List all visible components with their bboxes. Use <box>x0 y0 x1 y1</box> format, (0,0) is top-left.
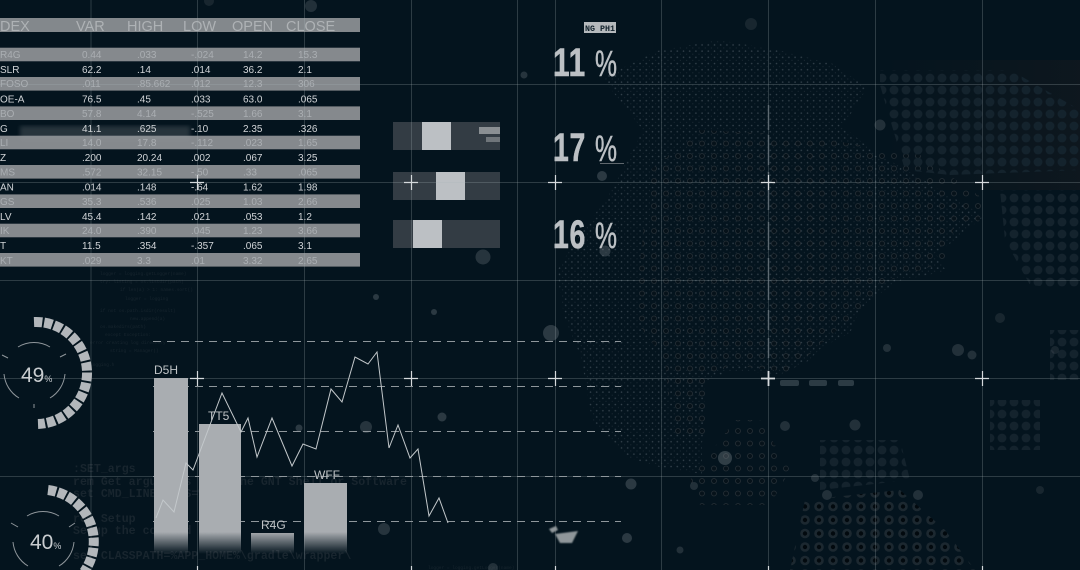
table rows on dark: OE-A <box>0 94 25 106</box>
table header: LOW <box>183 19 216 35</box>
table rows on dark: .014 <box>82 182 102 194</box>
stat 11%: 11 <box>553 41 586 85</box>
table rows on dark: 63.0 <box>243 94 263 106</box>
table rows on dark: G <box>0 124 8 135</box>
table rows on bands: .01 <box>191 256 205 267</box>
table rows on dark: -.64 <box>191 182 209 194</box>
table rows on dark: 1.62 <box>243 182 263 194</box>
table rows on bands: 4.14 <box>137 109 157 120</box>
table header <box>0 18 360 35</box>
table rows on dark: 62.2 <box>82 65 102 76</box>
faint code text: Setup the command line <box>73 525 226 538</box>
stat 16%: 16 <box>553 213 586 257</box>
faint code text: try: listing = os.listdir(path) <box>100 279 184 285</box>
table rows on dark: 36.2 <box>243 65 263 76</box>
bar R4G: R4G <box>261 518 286 532</box>
stat 16%: % <box>595 215 617 256</box>
table rows on bands: BO <box>0 109 15 120</box>
faint code text: logging.h <box>90 362 115 368</box>
table rows on dark: .033 <box>191 94 211 106</box>
table rows on dark: 1.2 <box>298 212 312 223</box>
table rows on dark: .14 <box>137 65 151 76</box>
table rows on bands: .390 <box>137 226 157 237</box>
gauge 40% <box>11 490 94 570</box>
dotted world globe map <box>550 30 1080 570</box>
table rows on dark: .065 <box>298 94 318 106</box>
table rows on bands: -.50 <box>191 168 209 178</box>
table rows on dark: .142 <box>137 212 157 223</box>
table rows on bands: 1.65 <box>298 138 318 149</box>
table rows on dark: .014 <box>191 65 211 76</box>
table rows on bands: 1.03 <box>243 197 263 208</box>
bar D5H: D5H <box>154 363 178 377</box>
table rows on bands: .572 <box>82 168 102 178</box>
table rows on dark: .002 <box>191 153 211 164</box>
table rows on bands: 3.32 <box>243 256 263 267</box>
bar TT5: TT5 <box>208 409 230 423</box>
table rows on bands: KT <box>0 256 13 267</box>
table rows on bands: -.024 <box>191 50 214 61</box>
bar WFF <box>304 468 347 556</box>
table rows on dark: .625 <box>137 124 157 135</box>
table header: OPEN <box>232 19 273 35</box>
table rows on dark: 2.1 <box>298 65 312 76</box>
stat 11%: % <box>595 43 617 84</box>
table rows on dark: -.357 <box>191 241 214 252</box>
table header: CLOSE <box>286 19 335 35</box>
data table <box>0 18 360 267</box>
tag label: NG PH1 <box>585 24 615 34</box>
bar and line chart <box>153 342 621 556</box>
table rows on bands: 14.0 <box>82 138 102 149</box>
table rows on bands: 14.2 <box>243 50 263 61</box>
table rows on dark: 3.25 <box>298 153 318 164</box>
gauge value: 40% <box>30 531 61 554</box>
table rows on bands: 2.65 <box>298 256 318 267</box>
table rows on bands: .011 <box>82 79 101 90</box>
table rows on dark: 3.1 <box>298 241 312 252</box>
table streak <box>20 126 190 140</box>
table rows on bands: IK <box>0 226 10 237</box>
small dashes near map centre <box>780 380 854 386</box>
table rows on dark: Z <box>0 153 6 164</box>
table header: DEX <box>0 19 30 35</box>
bar D5H <box>154 363 188 556</box>
faint code text: os.makedirs(path) <box>100 324 146 330</box>
table rows on bands: 32.15 <box>137 168 162 178</box>
table rows on bands: 1.66 <box>243 109 263 120</box>
table rows on dark: 2.35 <box>243 124 263 135</box>
table rows on dark: .021 <box>191 212 211 223</box>
table bands <box>0 48 360 267</box>
table rows on dark: .354 <box>137 241 157 252</box>
table rows on bands: 35.3 <box>82 197 102 208</box>
table header: VAR <box>76 19 105 35</box>
table rows on bands: .045 <box>191 226 211 237</box>
bar R4G <box>251 518 294 556</box>
table rows on bands: 15.3 <box>298 50 318 61</box>
bar TT5 <box>199 409 241 556</box>
table rows on bands: .025 <box>191 197 211 208</box>
table rows on dark: .200 <box>82 153 102 164</box>
table header: HIGH <box>127 19 163 35</box>
table rows on dark: .326 <box>298 124 318 135</box>
table rows on dark: T <box>0 241 6 252</box>
table rows on bands: .536 <box>137 197 157 208</box>
faint code text: rem Get arguments from the GNT Shell or Software <box>73 476 407 489</box>
crosshairs <box>190 175 989 570</box>
faint code text: logger = logging <box>125 296 169 302</box>
faint code text: set CMD_LINE_ARGS=%$ <box>73 488 212 501</box>
faint code text: string = Manager() <box>110 348 159 354</box>
table rows on bands: .029 <box>82 256 102 267</box>
table rows on bands <box>0 50 318 267</box>
table rows on bands: .023 <box>243 138 263 149</box>
blurred glyph fragment <box>549 526 578 543</box>
faint code text: new.append(a) <box>130 316 165 322</box>
table rows on bands: -.112 <box>191 138 213 149</box>
bar panel 3 <box>393 220 500 248</box>
table rows on bands: 1.23 <box>243 226 263 237</box>
stat 17%: % <box>595 128 617 169</box>
table rows on bands: 17.8 <box>137 138 157 149</box>
stat 17%: 17 <box>553 126 586 170</box>
table rows on bands: .85.662 <box>137 79 171 90</box>
bar WFF: WFF <box>314 468 340 482</box>
table rows on bands: -.525 <box>191 109 214 120</box>
table rows on dark: .065 <box>243 241 263 252</box>
bright vertical segments <box>768 105 770 358</box>
table rows on dark: 76.5 <box>82 94 102 106</box>
table rows on bands: 57.8 <box>82 109 102 120</box>
table rows on dark: 20.24 <box>137 153 162 164</box>
faint code text: rem Setup <box>73 513 136 526</box>
percent stats <box>553 22 624 257</box>
faint code text: :SET_args <box>73 463 136 476</box>
table rows on bands: LI <box>0 138 8 149</box>
table rows on dark: -.10 <box>191 124 209 135</box>
table rows on dark: SLR <box>0 65 19 76</box>
table rows on bands: 2.66 <box>298 197 318 208</box>
table rows on bands: FOSO <box>0 79 29 90</box>
dashed guide lines <box>153 342 621 522</box>
gauge 49% <box>2 322 87 424</box>
table rows on dark: 41.1 <box>82 124 102 135</box>
table rows on dark: 45.4 <box>82 212 102 223</box>
faint code text: except Exception: <box>105 332 151 338</box>
table rows on bands: 0.44 <box>82 50 102 61</box>
table rows on dark: .067 <box>243 153 263 164</box>
faint code text: set CLASSPATH=%APP_HOME%\gradle\wrapper\ <box>73 550 351 563</box>
table rows on bands: 24.0 <box>82 226 102 237</box>
table rows on bands: .033 <box>137 50 157 61</box>
table rows on bands: 306 <box>298 79 315 90</box>
bokeh circles <box>204 0 1059 570</box>
table rows on dark: 1.98 <box>298 182 318 194</box>
faint code text: if len(a) > 1: names.sort() <box>120 287 193 293</box>
faint code text: if not os.path.isdir(result) <box>100 308 176 314</box>
horizontal bar panels <box>393 122 500 248</box>
table rows on dark: AN <box>0 182 14 194</box>
faint code text <box>73 271 514 570</box>
table rows on bands: GS <box>0 197 15 208</box>
table rows on bands: 3.1 <box>298 109 312 120</box>
table rows on bands: .065 <box>298 168 318 178</box>
table rows on dark: 11.5 <box>82 241 101 252</box>
bar panel 2 <box>393 172 500 200</box>
table rows on bands: 3.66 <box>298 226 318 237</box>
faint code text: logger = logging.getLogger(name) <box>100 271 186 277</box>
table rows on dark: .148 <box>137 182 157 194</box>
stat 11% <box>553 41 617 85</box>
table rows on bands: MS <box>0 168 15 178</box>
table rows on dark: .053 <box>243 212 263 223</box>
faint code text: error creating log directory <box>90 340 166 346</box>
table rows on bands: 3.3 <box>137 256 151 267</box>
table rows on dark <box>0 65 318 252</box>
table rows on dark: .45 <box>137 94 151 106</box>
gauge value: 49% <box>21 364 52 387</box>
table rows on bands: .33 <box>243 168 257 178</box>
table rows on dark: LV <box>0 212 12 223</box>
table rows on bands: 12.3 <box>243 79 263 90</box>
bar panel 1 <box>393 122 500 150</box>
line series <box>156 352 448 523</box>
table rows on bands: R4G <box>0 50 21 61</box>
table rows on bands: .012 <box>191 79 211 90</box>
